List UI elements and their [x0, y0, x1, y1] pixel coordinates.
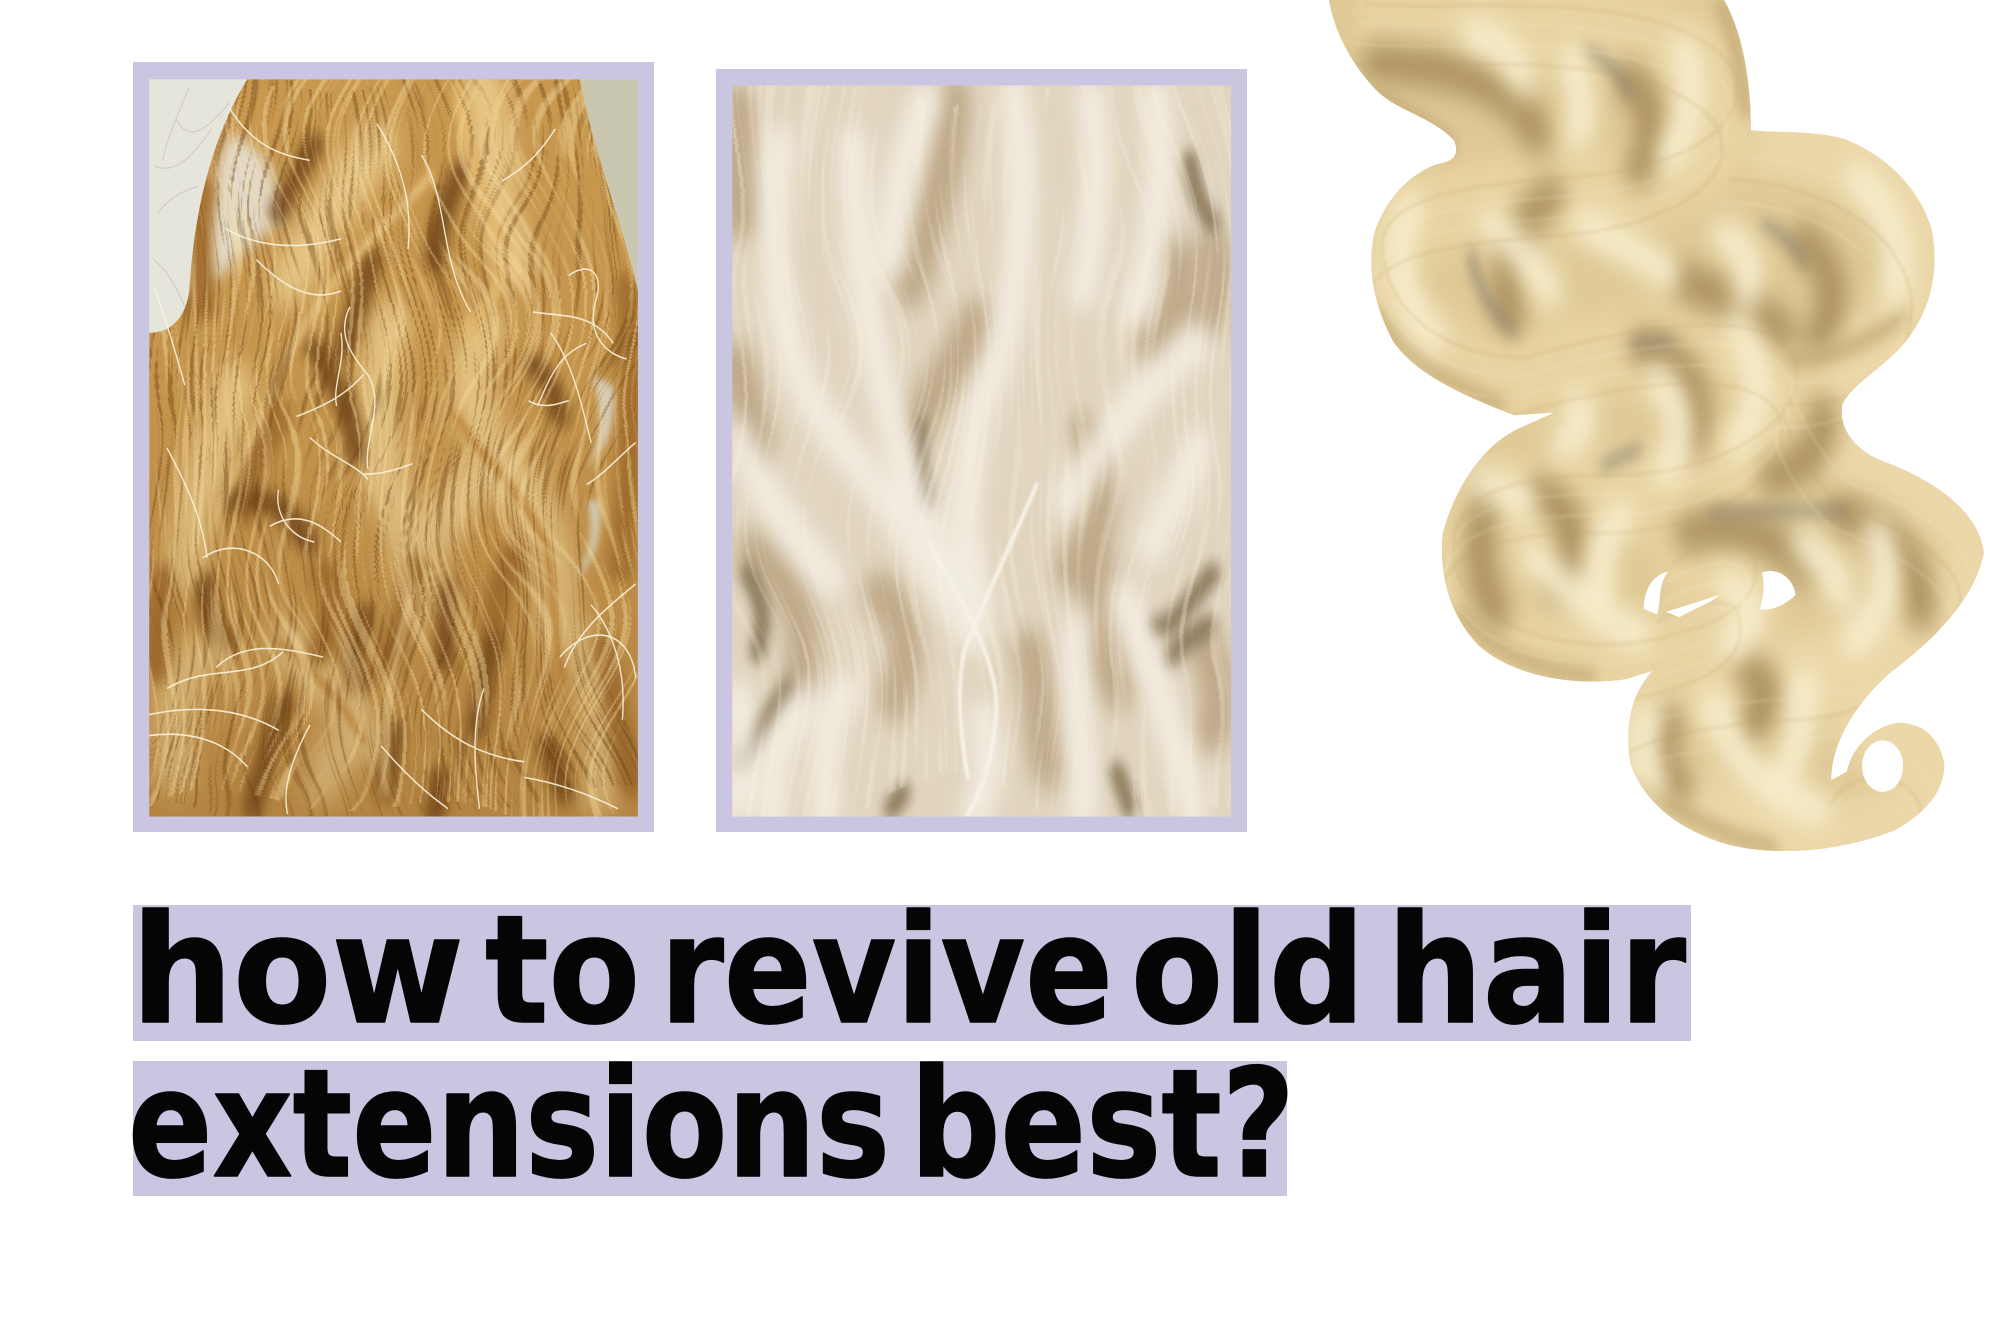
panel: damaged hair photo frame — [133, 62, 654, 832]
title line 1: how — [131, 884, 464, 1058]
panel: healthy hair photo frame — [716, 69, 1247, 832]
title line 1: old — [1131, 884, 1365, 1058]
diagonal hair locks — [189, 87, 564, 793]
title highlight bars — [133, 905, 1691, 1196]
title line 1: hair — [1387, 884, 1686, 1058]
title line 1: revive — [660, 884, 1113, 1058]
title line 2: extensions — [128, 1038, 890, 1212]
flyaway strands — [149, 108, 636, 814]
photo: blonde body-wave hair bundle — [1329, 0, 1984, 851]
title line 1 — [131, 884, 1686, 1058]
title: how to revive old hair extensions best? — [128, 884, 1691, 1212]
hair gaps: white holes through the curls — [1644, 571, 1903, 792]
photo: smooth blonde waves — [732, 86, 1232, 817]
photo: dry frizzy golden hair — [149, 79, 638, 817]
title line 2: best? — [910, 1038, 1295, 1212]
title line 1: to — [485, 884, 640, 1058]
flowing strand lines — [1367, 4, 1961, 812]
